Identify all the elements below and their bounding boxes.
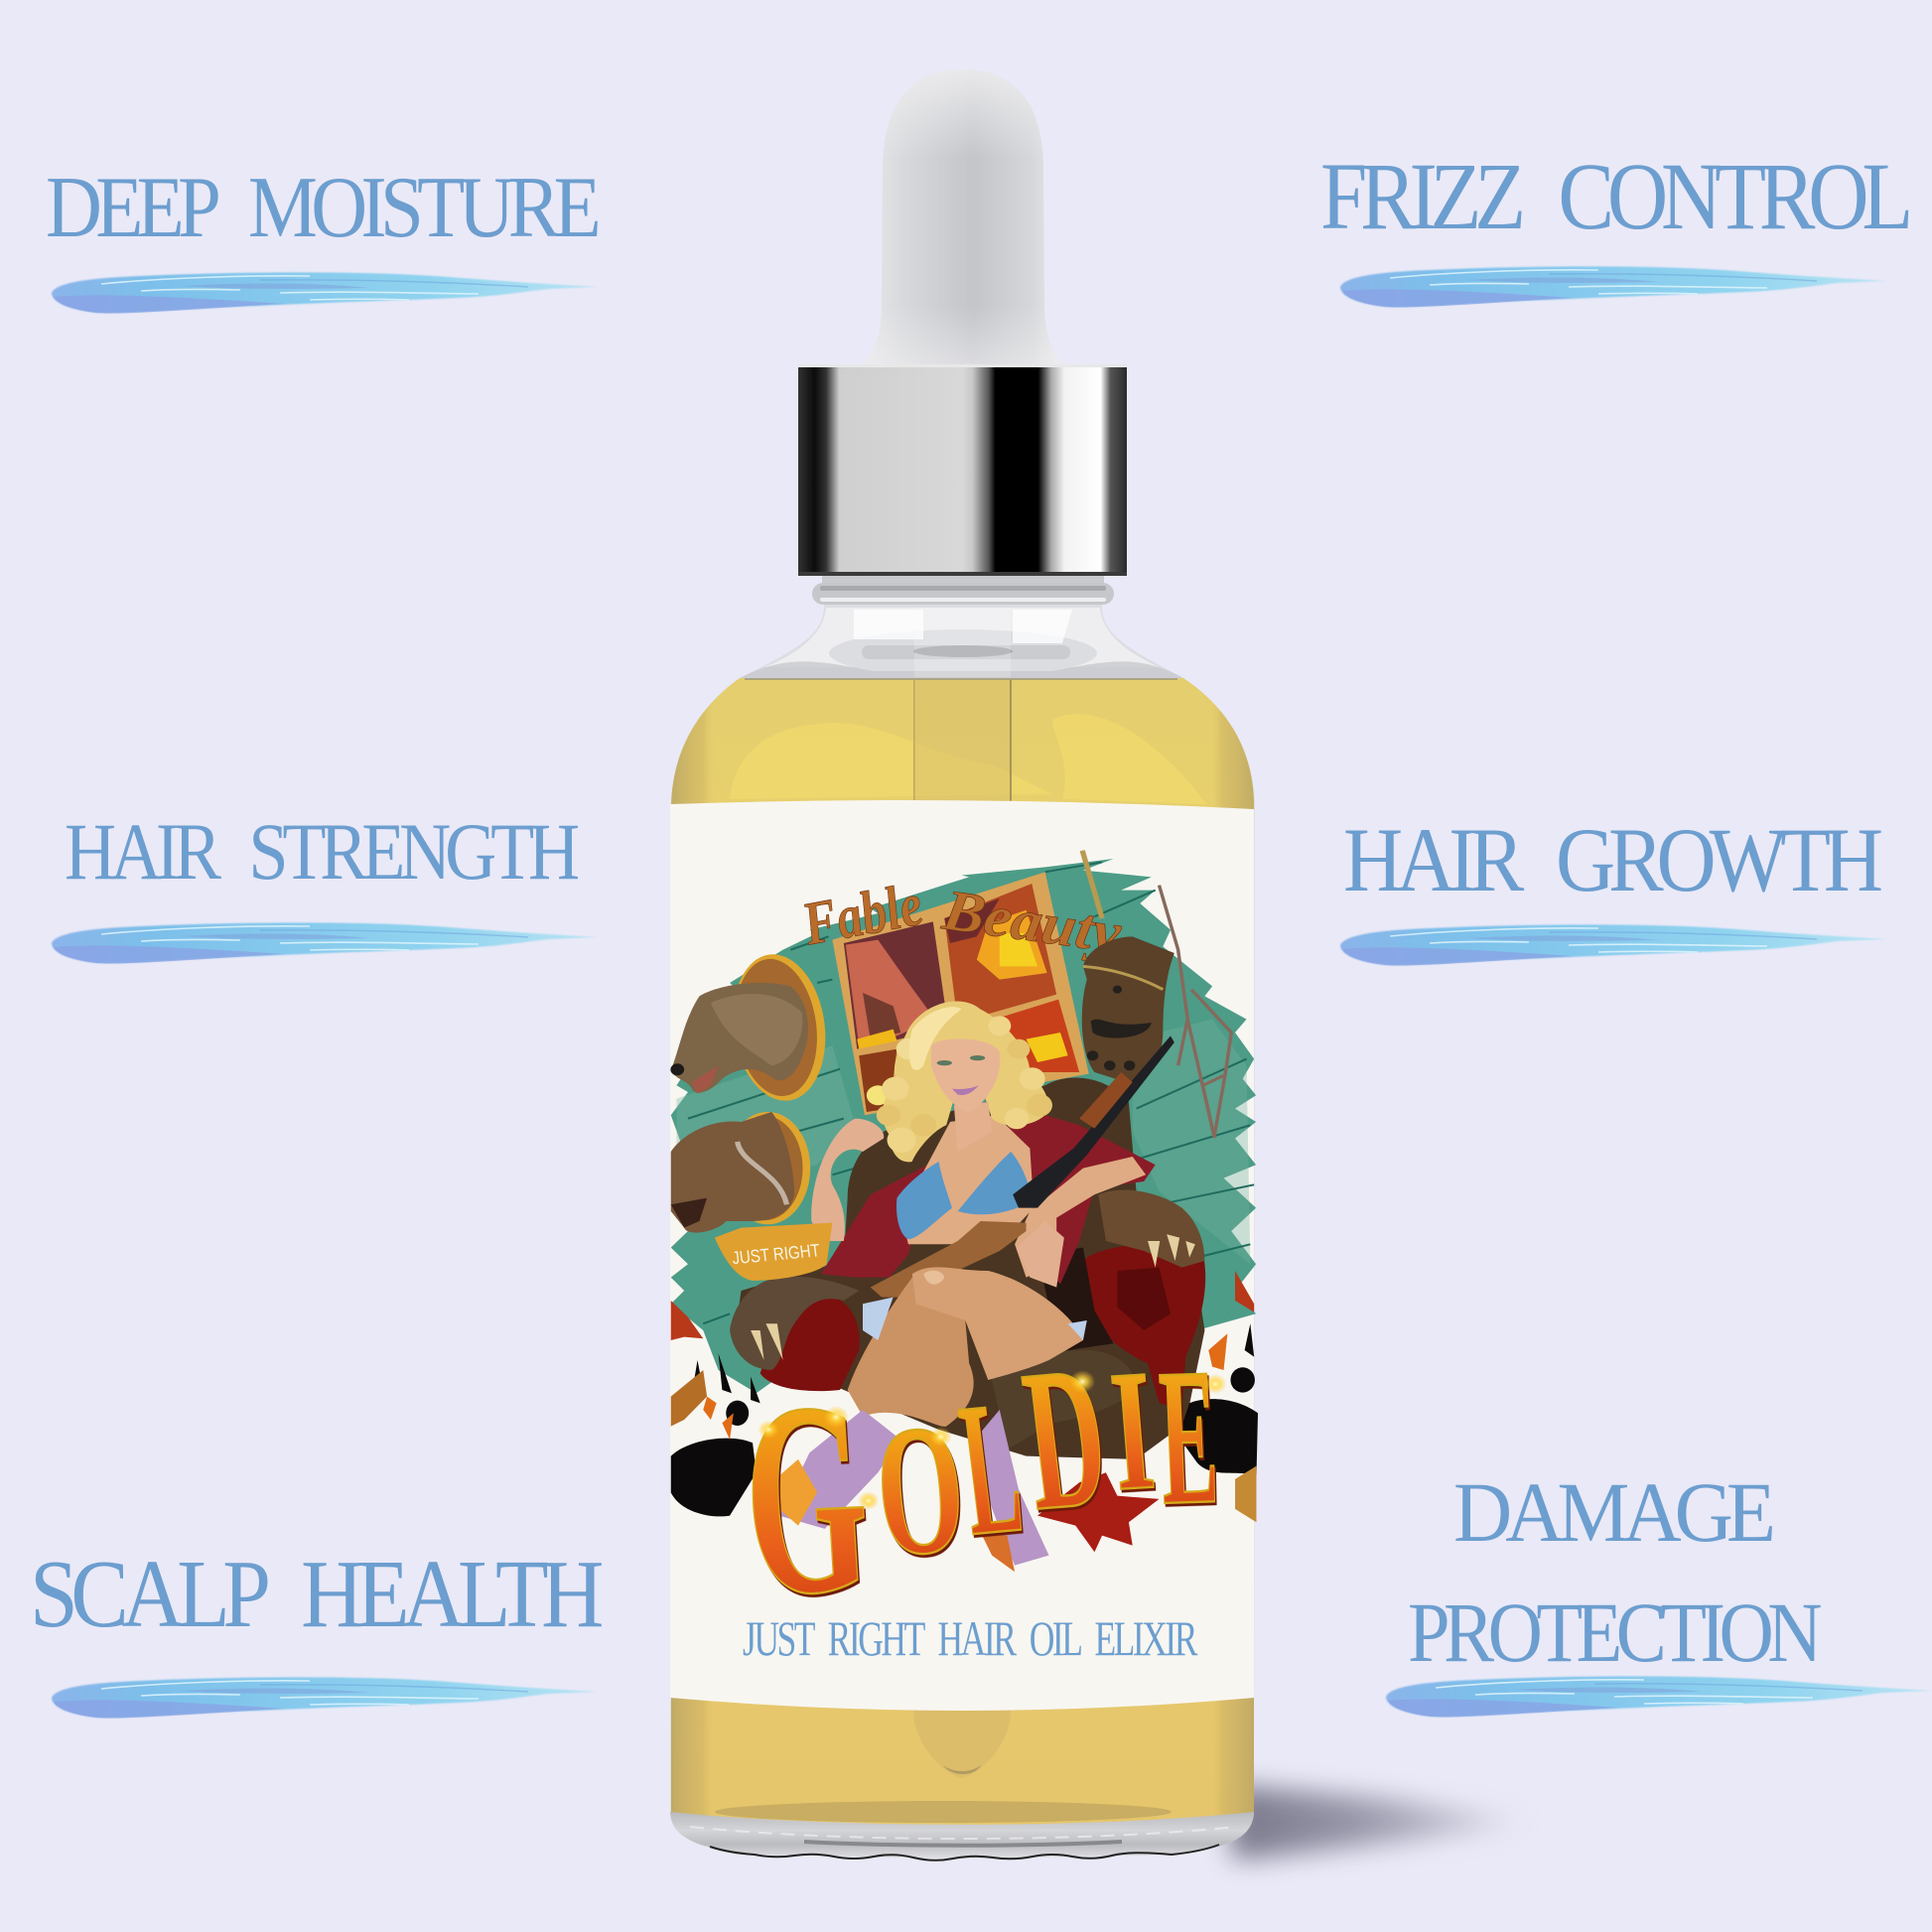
dark chair shadow (1037, 1248, 1114, 1350)
benefit: hair growth: HAIR GROWTH (1343, 809, 1881, 910)
oil highlights (730, 678, 1206, 804)
product subtitle: JUST RIGHT HAIR OIL ELIXIR (743, 1610, 1198, 1666)
silver collar (798, 364, 1127, 576)
GOLDIE title: O (870, 1386, 971, 1595)
autumn leaves (671, 1271, 1256, 1572)
bowl JUST RIGHT (715, 1223, 832, 1281)
benefit: hair growth (1340, 809, 1887, 965)
hand on rifle (1017, 1221, 1064, 1288)
benefit: scalp health (30, 1541, 602, 1718)
red armchair cushions (760, 1241, 1205, 1410)
bottle neck ring (812, 574, 1114, 605)
Fable Beauty script: Fable (795, 871, 929, 958)
benefit: deep moisture (46, 160, 599, 313)
brush underline (52, 1677, 599, 1718)
woman arms (811, 1119, 1146, 1278)
mounted bear head upper (670, 950, 833, 1105)
oil fill (671, 678, 1254, 1825)
inner pipette tip (913, 1708, 1011, 1778)
Fable Beauty script: Beauty (937, 877, 1128, 965)
benefit: damage protection: DAMAGE (1453, 1464, 1773, 1560)
benefit: hair strength (52, 806, 599, 963)
blonde curly hair (877, 1002, 1052, 1162)
boots (779, 1410, 1049, 1566)
benefit: damage protection (1386, 1464, 1932, 1717)
rifle (1013, 1035, 1174, 1208)
benefit: scalp health: SCALP HEALTH (30, 1541, 602, 1648)
oil pool at base (715, 1801, 1172, 1823)
label illustration: E (1156, 1327, 1221, 1546)
label (670, 800, 1258, 1711)
label illustration (670, 851, 1258, 1654)
woman face and neck (931, 1038, 1000, 1152)
bottle glass body (670, 604, 1255, 1859)
armchair fur arms and claws (730, 1190, 1204, 1449)
woman torso (898, 1115, 1034, 1244)
brush underline (1340, 924, 1887, 965)
bottle shadow (1231, 1785, 1524, 1859)
GOLDIE title: L (951, 1360, 1032, 1576)
black paw prints (671, 1323, 1258, 1516)
rope (1082, 851, 1102, 918)
GOLDIE title: D (1015, 1324, 1117, 1553)
glass base (670, 1812, 1254, 1861)
rifle stock (871, 1221, 1027, 1298)
rubber dropper bulb (864, 69, 1062, 364)
teal brushed wall (671, 859, 1256, 1393)
title sparkles (758, 1370, 1227, 1510)
brush underline (52, 272, 599, 313)
window (832, 872, 1089, 1115)
brush underline (1340, 266, 1887, 307)
GOLDIE title (737, 1324, 1221, 1654)
GOLDIE title: I (1105, 1335, 1161, 1527)
glass shoulder details (740, 608, 1183, 678)
brush underline (52, 922, 599, 963)
brush underline (1386, 1676, 1932, 1717)
animal trap (1160, 886, 1231, 1137)
mounted bear head lower (671, 1112, 810, 1233)
stuffed bear paw (1082, 936, 1174, 1085)
blue bikini (897, 1152, 1032, 1239)
armchair fur back (734, 1077, 1204, 1459)
label paper (670, 800, 1254, 1711)
benefit: frizz control (1320, 143, 1908, 307)
product: dropper bottle (670, 69, 1255, 1861)
benefit: damage protection: PROTECTION (1408, 1585, 1822, 1680)
bowl JUST RIGHT: JUST RIGHT (731, 1240, 821, 1269)
GOLDIE title: G (737, 1345, 876, 1654)
woman crossed legs (848, 1267, 1087, 1427)
benefit: hair strength: HAIR STRENGTH (65, 806, 578, 897)
Fable Beauty script (795, 871, 1128, 965)
woman shirt (821, 1115, 1156, 1284)
benefit: deep moisture: DEEP MOISTURE (46, 160, 598, 256)
